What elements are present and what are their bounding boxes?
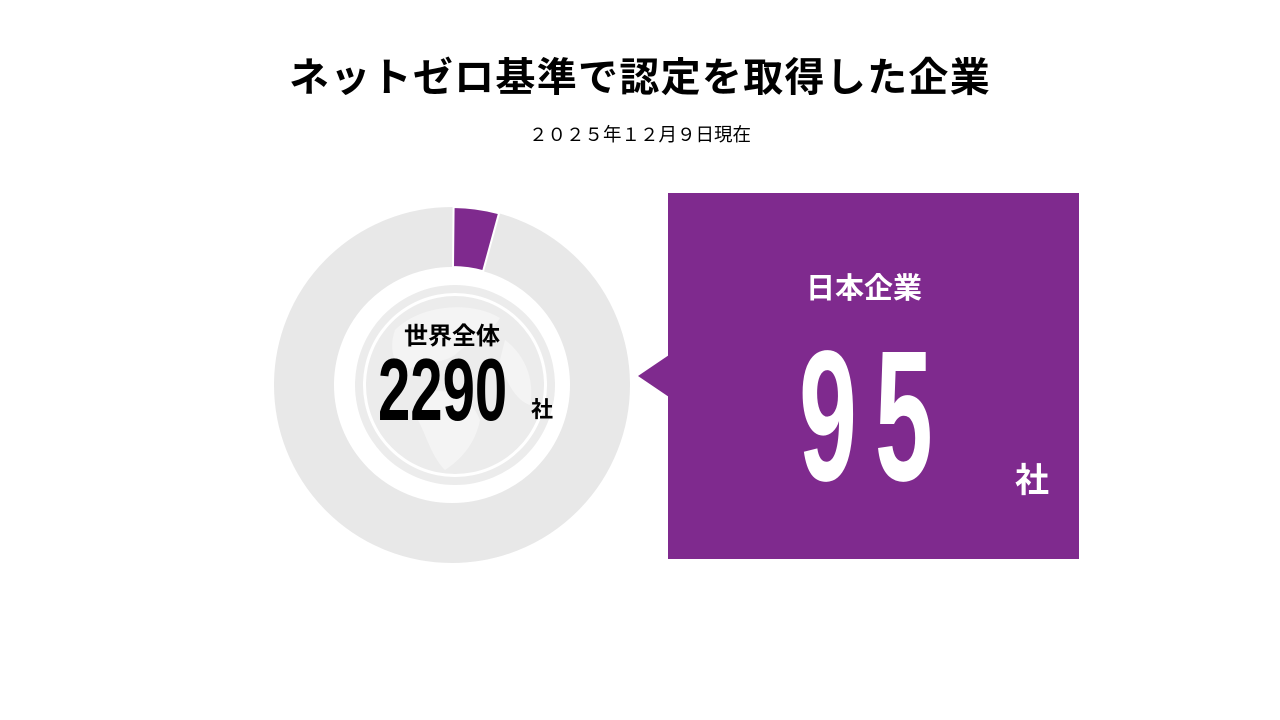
icon: globe bbox=[355, 285, 555, 485]
panel: japan bbox=[668, 193, 1079, 559]
unit: 社 bbox=[531, 397, 553, 422]
subtitle date: ２０２５年１２月９日現在 bbox=[529, 124, 751, 145]
label: world total bbox=[378, 323, 553, 439]
arrow pointer bbox=[638, 355, 669, 397]
heading: 日本企業 bbox=[806, 273, 922, 305]
unit: 社 bbox=[1015, 462, 1049, 500]
text: 世界全体 bbox=[404, 323, 500, 350]
segment: japan bbox=[453, 207, 499, 271]
title: ネットゼロ基準で認定を取得した企業 bbox=[289, 56, 991, 100]
number 2290: 2290 bbox=[378, 340, 507, 439]
ring background bbox=[304, 237, 600, 533]
number 95: 95 bbox=[799, 313, 951, 520]
